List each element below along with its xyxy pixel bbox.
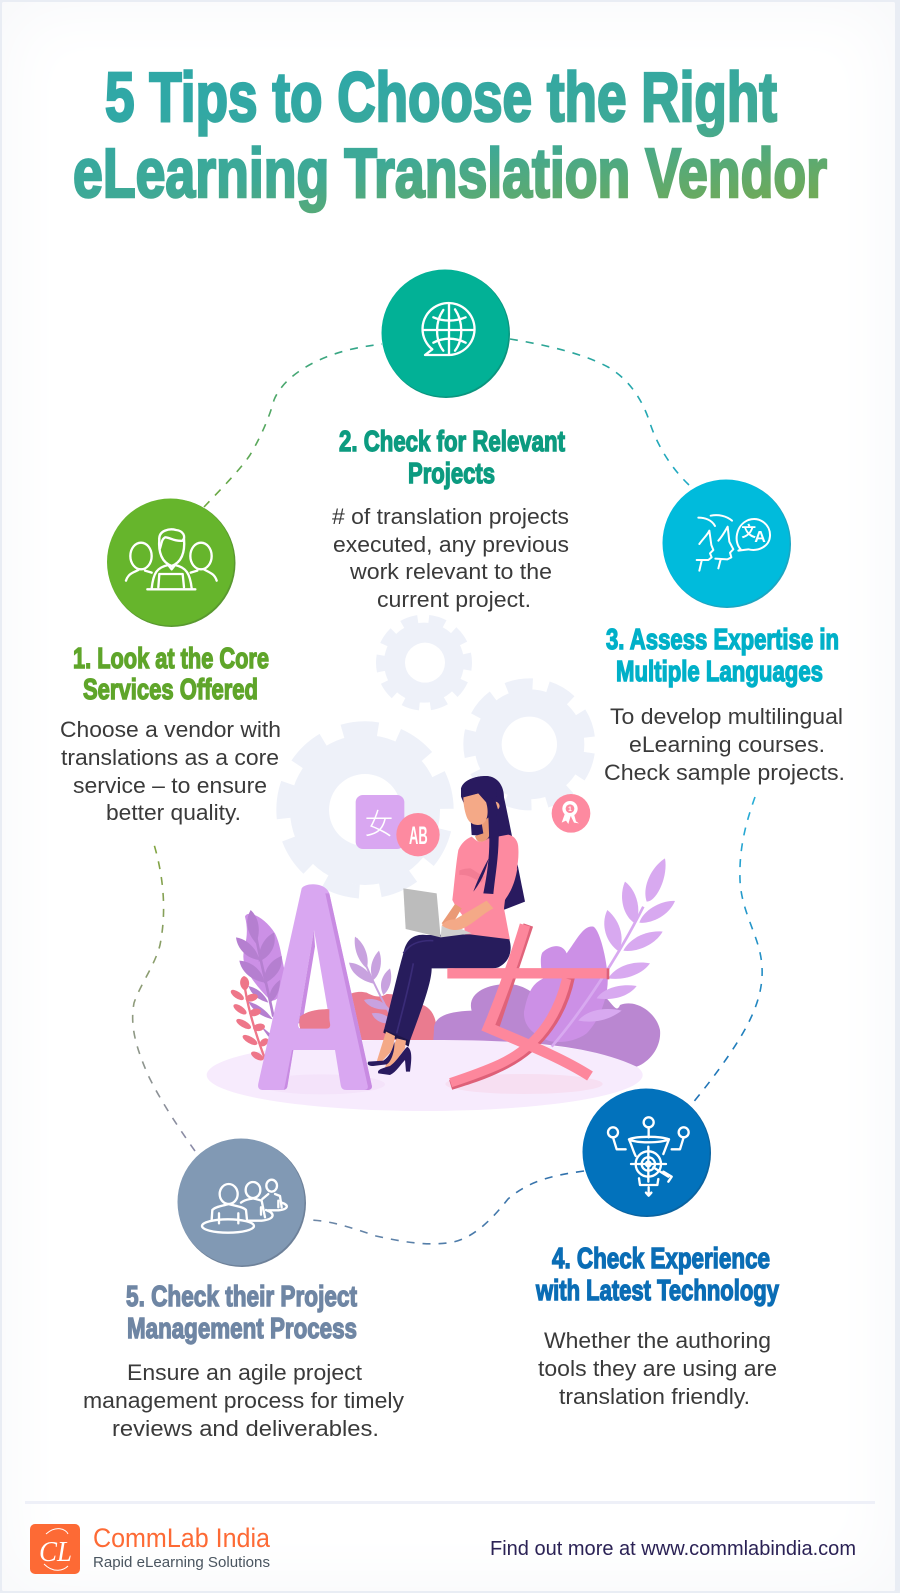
tip 3: text xyxy=(604,704,845,785)
woman arms xyxy=(442,868,517,930)
woman neck and face xyxy=(463,793,500,842)
tip 3: text: Check sample projects. xyxy=(604,760,845,785)
right branch xyxy=(552,858,675,1047)
tip 2: text: # of translation projects xyxy=(332,504,569,529)
tip 3: circle and icon xyxy=(662,480,791,608)
middle sprig xyxy=(349,937,397,1027)
tip 1: text: translations as a core xyxy=(61,745,279,770)
tip 4: text xyxy=(538,1328,777,1409)
woman legs and heels xyxy=(368,1032,411,1075)
tip 4: heading: with Latest Technology xyxy=(535,1275,779,1307)
tip 4: circle and icon xyxy=(582,1088,711,1217)
woman fringe and front hair xyxy=(461,776,499,894)
footer logo: CommLab India: CL xyxy=(39,1537,72,1568)
dashed connector: tip 3 to tip 4 xyxy=(691,797,762,1105)
gear medium xyxy=(462,677,597,812)
tip 5: circle and icon xyxy=(178,1138,306,1267)
tip 3: text: eLearning courses. xyxy=(629,732,825,757)
woman top xyxy=(452,835,518,940)
tip 5: text xyxy=(83,1360,405,1441)
letter A xyxy=(258,884,372,1090)
left plant xyxy=(236,910,287,1037)
tip 1: circle and icon xyxy=(107,498,236,627)
dashed connector: tip 5 to tip 1 xyxy=(133,841,195,1151)
tip 3: heading xyxy=(606,624,839,688)
tip 2: text xyxy=(332,504,569,612)
dashed connector: tip 2 to tip 3 xyxy=(510,339,689,485)
woman pants xyxy=(383,934,511,1047)
tip 5: text: reviews and deliverables. xyxy=(112,1416,379,1441)
tip 1: text: service – to ensure xyxy=(73,773,267,798)
footer divider xyxy=(25,1501,875,1504)
tip 5: heading xyxy=(126,1281,357,1345)
illustration: woman with laptop on letters xyxy=(207,611,675,1111)
tip 2: heading: 2. Check for Relevant xyxy=(339,426,565,458)
footer logo: CommLab India: CommLab India xyxy=(93,1523,271,1553)
tip 2: text: work relevant to the xyxy=(349,559,552,584)
woman back hair xyxy=(461,776,525,910)
tip 2: heading xyxy=(339,426,565,490)
tip 4: text: translation friendly. xyxy=(559,1384,750,1409)
tip 3: text: To develop multilingual xyxy=(610,704,843,729)
tip 4: text: Whether the authoring xyxy=(544,1328,771,1353)
laptop xyxy=(403,888,472,937)
shadows on ground xyxy=(258,1074,385,1094)
tip 3: heading: Multiple Languages xyxy=(616,656,823,688)
woman top fold xyxy=(459,868,485,883)
badge: translation character: 女 xyxy=(365,802,393,843)
letter 女 xyxy=(447,925,609,1085)
tip 2: heading: Projects xyxy=(408,458,495,490)
pink sprig xyxy=(229,976,270,1063)
tip 1: text xyxy=(60,717,281,825)
tip 2: circle and icon xyxy=(382,270,510,398)
gear large xyxy=(266,711,464,909)
tip 1: text: Choose a vendor with xyxy=(60,717,281,742)
back bushes xyxy=(300,927,660,1067)
tip 2: text: executed, any previous xyxy=(333,532,569,557)
icon: funnel target xyxy=(608,1117,689,1196)
gear small xyxy=(373,611,475,714)
tip 5: heading: 5. Check their Project xyxy=(126,1281,357,1313)
tip 2: text: current project. xyxy=(377,587,531,612)
badge: translation character xyxy=(356,795,440,856)
tip 4: heading: 4. Check Experience xyxy=(552,1243,770,1275)
tip 5: text: management process for timely xyxy=(83,1388,405,1413)
tip 4: text: tools they are using are xyxy=(538,1356,777,1381)
footer link text: Find out more at www.commlabindia.com xyxy=(490,1538,856,1560)
ground ellipse xyxy=(207,1039,643,1111)
tip 1: heading: Services Offered xyxy=(83,674,258,706)
icon: team at laptop xyxy=(126,529,217,589)
badge: award ribbon: 1 xyxy=(568,806,572,813)
icon: faces and translate bubble: A xyxy=(754,529,766,546)
icon: faces and translate bubble: 文 xyxy=(741,521,756,542)
tip 5: heading: Management Process xyxy=(127,1313,357,1345)
dashed connector: tip 1 to tip 2 xyxy=(204,344,382,507)
tip 5: text: Ensure an agile project xyxy=(127,1360,363,1385)
tip 1: heading: 1. Look at the Core xyxy=(73,643,269,675)
icon: faces and translate bubble xyxy=(697,515,770,571)
title xyxy=(73,58,827,212)
footer logo: CommLab India xyxy=(30,1523,271,1574)
icon: speech-bubble globe xyxy=(423,303,475,355)
dashed connector: tip 4 to tip 5 xyxy=(307,1171,584,1244)
icon: team lined up xyxy=(202,1180,287,1233)
tip 1: heading xyxy=(73,643,269,706)
footer logo: CommLab India: Rapid eLearning Solutions xyxy=(93,1555,270,1571)
tip 1: text: better quality. xyxy=(106,800,241,825)
badge: award ribbon xyxy=(552,794,590,833)
tip 4: heading xyxy=(535,1243,779,1307)
badge: translation character: AB xyxy=(409,822,428,850)
